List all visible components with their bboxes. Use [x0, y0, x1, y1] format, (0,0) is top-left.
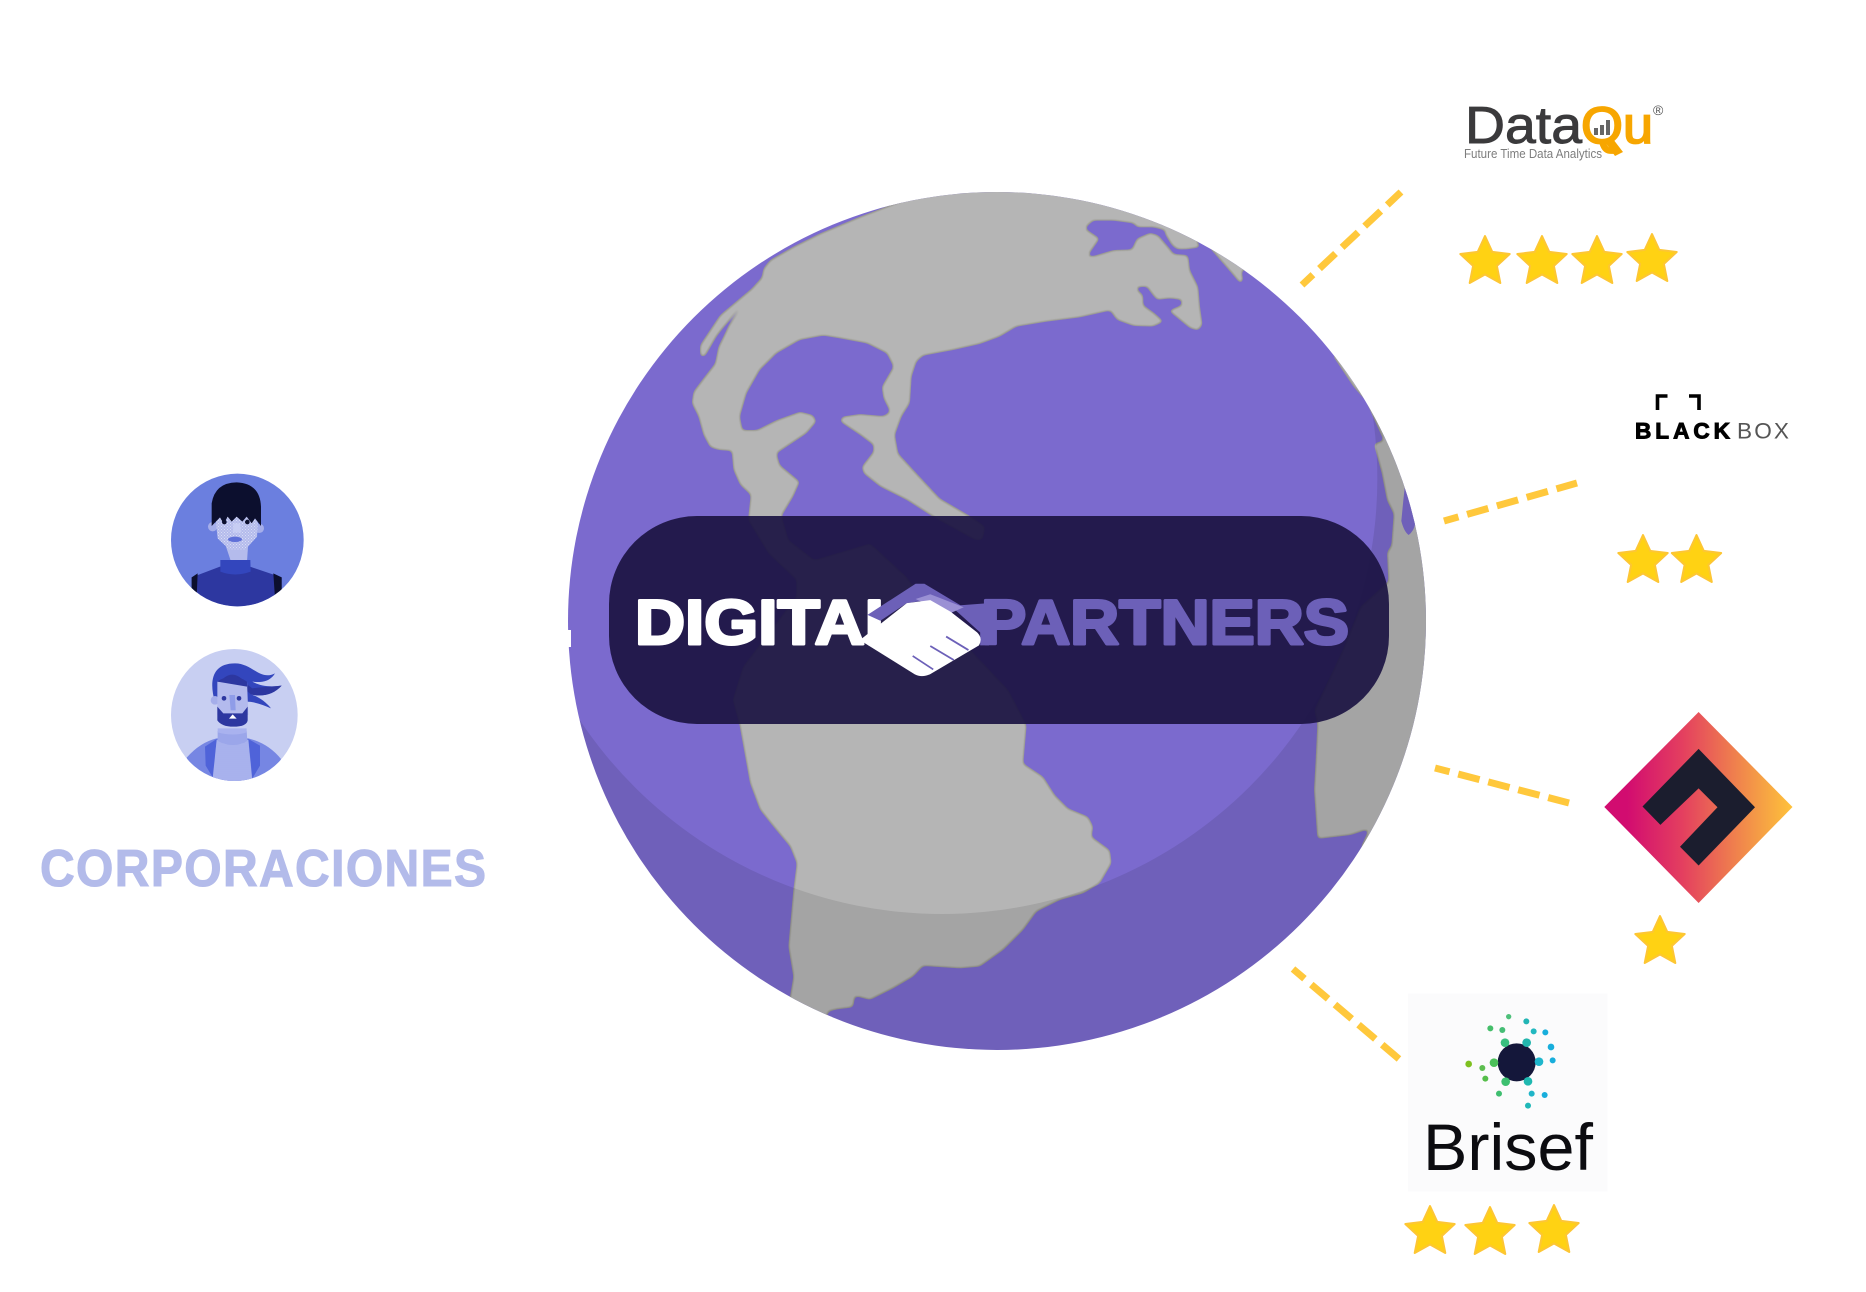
logo: DataQu: Future Time Data Analytics: [1464, 146, 1602, 161]
icon: handshake: [860, 584, 989, 676]
logo pill: Digital Partners: [609, 516, 1389, 724]
rating: diamond logo one star: [1635, 916, 1685, 963]
heading: CORPORACIONES: CORPORACIONES: [40, 839, 487, 897]
avatar: bearded person: [171, 649, 298, 785]
rating: Brisef three stars: [1405, 1205, 1579, 1254]
globe continents: [580, 192, 1426, 1050]
avatar: person with fringe: [171, 474, 304, 613]
rating: BlackBox two stars: [1618, 535, 1721, 582]
dashed connector: DataQu: [1302, 192, 1401, 285]
Brisef panel: [1408, 994, 1608, 1192]
dashed connector: BlackBox: [1444, 483, 1577, 521]
dashed connector: diamond logo: [1435, 768, 1569, 803]
logo: BlackBox: BOX: [1737, 418, 1789, 444]
Brisef emblem: [1465, 1014, 1556, 1109]
logo: gradient diamond: [1604, 712, 1792, 903]
logo: DataQu: [1464, 97, 1664, 161]
pill background: [609, 516, 1389, 724]
logo: DataQu: Qu: [1581, 97, 1653, 155]
logo: Brisef: [1408, 994, 1608, 1192]
globe edge notch: [566, 630, 571, 647]
wordmark: PARTNERS: PARTNERS: [981, 588, 1349, 658]
dashed connector: Brisef: [1293, 969, 1399, 1059]
logo: DataQu: Data: [1465, 97, 1582, 155]
globe: [568, 192, 1426, 1050]
globe lower shadow: [580, 414, 1426, 1050]
logo: DataQu: ®: [1653, 102, 1664, 118]
rating: DataQu four stars: [1460, 234, 1677, 283]
wordmark: DIGITAL: DIGITAL: [635, 588, 907, 658]
logo: BlackBox: BLACK: [1635, 418, 1731, 444]
Brisef wordmark: Brisef: [1423, 1110, 1594, 1184]
logo: BlackBox: [1635, 396, 1789, 444]
globe ocean: [568, 192, 1426, 1050]
